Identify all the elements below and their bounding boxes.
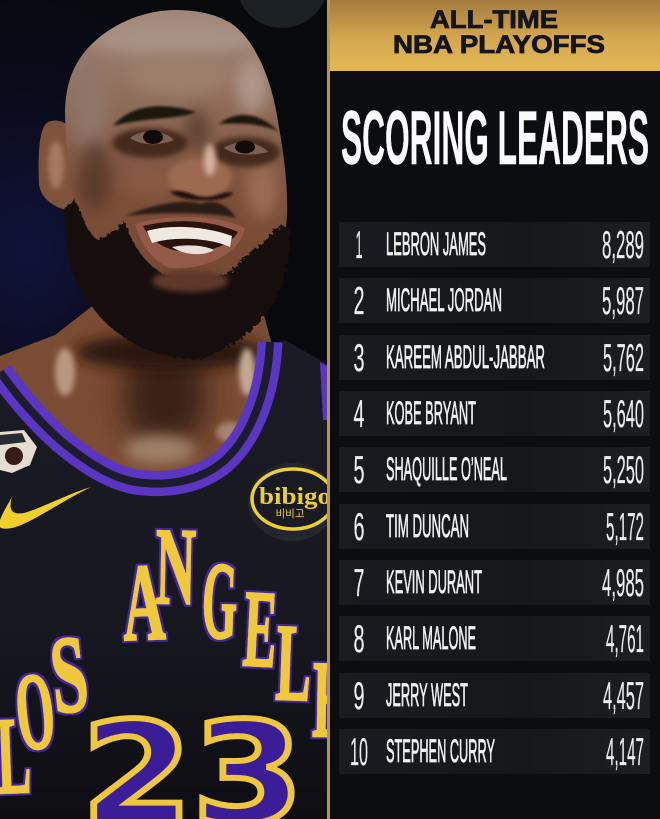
- head and face: [38, 10, 288, 277]
- heading: all-time nba playoffs: [393, 6, 605, 59]
- panel: leaderboard background: [330, 0, 660, 819]
- row 1: LEBRON JAMES: [386, 226, 486, 262]
- row 4: 4: [354, 393, 364, 436]
- jersey logo: yellow swoosh: [0, 487, 91, 529]
- jersey lettering: LOS ANGELES: S: [45, 612, 93, 737]
- gold divider line: [327, 0, 330, 819]
- mouth: [135, 217, 245, 268]
- row 2: 2: [354, 280, 364, 323]
- row 5: [339, 447, 650, 492]
- row 9: [339, 673, 650, 718]
- row 9: 9: [354, 675, 364, 718]
- row 8: [339, 616, 650, 661]
- row 1: 1: [356, 224, 362, 267]
- sponsor patch: bibigo: bibigo: [259, 484, 331, 510]
- row 8: 8: [354, 618, 364, 661]
- row 1: [339, 222, 650, 267]
- heading: all-time nba playoffs: ALL-TIME: [430, 6, 558, 34]
- row 4: KOBE BRYANT: [386, 395, 476, 431]
- sponsor patch: bibigo: 비비고: [276, 508, 305, 520]
- jersey lettering: LOS ANGELES: A: [121, 541, 167, 664]
- photo background: [0, 0, 324, 356]
- row 7: [339, 560, 650, 605]
- neck and chest: [0, 306, 272, 472]
- skull: [65, 10, 288, 277]
- row 4: [339, 391, 650, 436]
- row 7: 7: [354, 562, 364, 605]
- nose: [168, 158, 232, 198]
- sponsor patch: bibigo: [248, 463, 327, 541]
- row 10: 10: [350, 731, 368, 774]
- row 9: JERRY WEST: [386, 677, 468, 713]
- jersey lettering: LOS ANGELES: N: [155, 505, 197, 628]
- row 3: [339, 335, 650, 380]
- row 3: 3: [354, 337, 364, 380]
- row 2: [339, 278, 650, 323]
- beard: [65, 200, 290, 360]
- moustache: [126, 202, 236, 218]
- jersey number 23: [90, 715, 295, 819]
- row 8: KARL MALONE: [386, 620, 476, 656]
- header band: [330, 0, 660, 71]
- row 10: [339, 729, 650, 774]
- row 5: 5: [354, 449, 364, 492]
- jersey lettering: LOS ANGELES: L: [274, 601, 313, 724]
- row 6: TIM DUNCAN: [386, 508, 469, 544]
- ear: [38, 120, 74, 210]
- jersey lettering: LOS ANGELES: G: [200, 539, 239, 662]
- jersey lettering: LOS ANGELES: E: [241, 567, 280, 691]
- jersey lettering: LOS ANGELES: [0, 528, 327, 796]
- jersey lettering: LOS ANGELES: O: [10, 649, 60, 774]
- row 2: MICHAEL JORDAN: [386, 282, 502, 318]
- row 6: [339, 504, 650, 549]
- eyebrows: [113, 106, 196, 126]
- row 6: 6: [354, 506, 364, 549]
- heading: all-time nba playoffs: NBA PLAYOFFS: [393, 31, 605, 59]
- jersey body: [0, 340, 327, 736]
- panel: portrait photo of LeBron James: [0, 0, 348, 819]
- row 10: STEPHEN CURRY: [386, 733, 495, 769]
- jersey patch: playoffs logo: [0, 430, 37, 473]
- table: scoring leaders list: [339, 222, 650, 774]
- row 7: KEVIN DURANT: [386, 564, 482, 600]
- text: E: [312, 638, 348, 761]
- eye sockets and eyes: [112, 128, 188, 158]
- chin skin patch: [152, 270, 228, 292]
